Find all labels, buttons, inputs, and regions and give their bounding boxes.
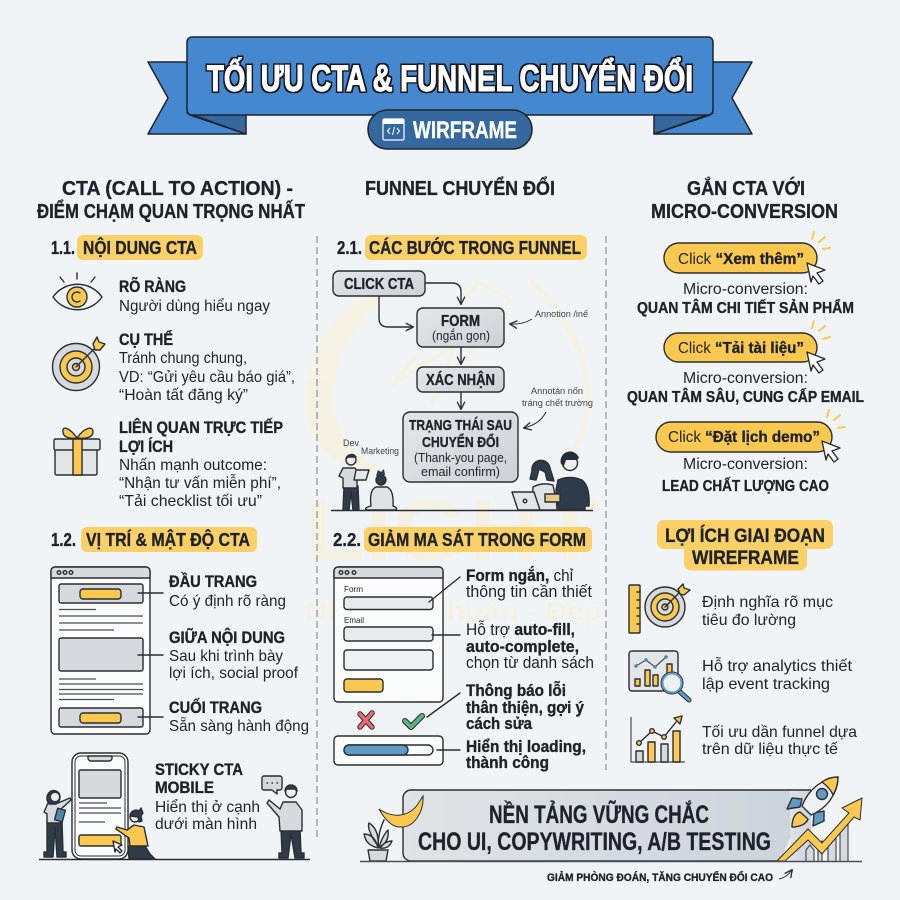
column heading: CTA (CALL TO ACTION) -: [62, 178, 293, 200]
ground line: [39, 858, 310, 860]
person: presenter with speech bubble: [262, 776, 304, 858]
text: liên quan: “Nhận tư vấn miễn phí”,: [119, 473, 281, 492]
person: marketing: Marketing: [361, 446, 399, 456]
icon: growth chart: [631, 716, 685, 762]
text: form ngắn: [466, 566, 592, 601]
icon: rocket: [787, 777, 838, 827]
section heading 2.1: [337, 235, 587, 260]
text: rõ ràng: RÕ RÀNG: [119, 276, 186, 296]
text: form ngắn: thông tin cần thiết: [466, 583, 592, 601]
icon: error cross: [360, 713, 372, 727]
ground line: [331, 510, 593, 512]
text: sticky CTA: MOBILE: [155, 779, 214, 797]
CTA button: tải tài liệu: Click “Tải tài liệu”: [678, 340, 804, 357]
callout lines: [427, 577, 460, 750]
text: định nghĩa: [702, 594, 833, 629]
text: giữa nội dung: GIỮA NỘI DUNG: [169, 627, 285, 647]
icon: ruler and target: [629, 584, 690, 633]
text: giữa nội dung: [169, 627, 299, 682]
CTA button: đặt lịch demo: Click “Đặt lịch demo”: [668, 429, 820, 446]
text: đầu trang: Có ý định rõ ràng: [169, 593, 286, 610]
icon: eye: [53, 273, 102, 310]
text: loading: Hiển thị loading,: [466, 738, 586, 756]
section heading 1.1: 1.1.: [51, 238, 75, 258]
watermark logo: Nhanh - Chuẩn - Đẹp: [305, 596, 602, 626]
text: cụ thể: VD: “Gửi yêu cầu báo giá”,: [119, 369, 295, 386]
text: liên quan: [119, 418, 283, 510]
left ribbon fold: [187, 113, 246, 134]
wireframe: progress card: [334, 736, 443, 765]
banner headline: CHO UI, COPYWRITING, A/B TESTING: [418, 828, 771, 856]
micro-conversion text 1: Micro-conversion:: [683, 281, 808, 298]
micro-conversion text 2: Micro-conversion:: [683, 370, 808, 387]
text: cụ thể: [119, 330, 295, 404]
wireframe: form window: Email: [344, 615, 364, 625]
icon: analytics: [629, 651, 689, 700]
micro-conversion text 2: [627, 370, 864, 406]
CTA button: đặt lịch demo: [656, 410, 845, 462]
section heading 2.1: CÁC BƯỚC TRONG FUNNEL: [369, 237, 581, 258]
box: form: FORM: [441, 313, 480, 330]
banner fill right: [790, 791, 811, 861]
heading: lợi ích giai đoạn wireframe: [657, 520, 833, 570]
box: click CTA: CLICK CTA: [344, 276, 414, 293]
wireframe pill: [368, 110, 532, 149]
text: sticky CTA: STICKY CTA: [155, 761, 243, 779]
ground line: [360, 860, 862, 862]
banner headline: NỀN TẢNG VỮNG CHẮC: [489, 799, 709, 829]
illustration: phone with sticky CTA: [72, 753, 128, 859]
text: analytics: [702, 656, 853, 693]
banner box: [403, 790, 811, 861]
panel: CTA column: [37, 178, 310, 860]
section heading 1.2: [51, 527, 257, 552]
text: liên quan: “Tải checklist tối ưu”: [119, 493, 262, 510]
icon: yellow crescent: [379, 796, 423, 827]
panel: funnel column: [331, 176, 594, 772]
banner body: [187, 37, 713, 115]
panel: bottom foundation banner: [360, 777, 862, 884]
text: tối ưu dần: [702, 724, 857, 758]
text: tối ưu dần: Tối ưu dần funnel dựa: [702, 724, 857, 741]
text: rõ ràng: Người dùng hiểu ngay: [119, 297, 270, 315]
text: định nghĩa: Định nghĩa rõ mục: [702, 594, 833, 611]
icon: success check: [405, 716, 422, 727]
text: loading: [466, 738, 586, 772]
micro-conversion text 3: LEAD CHẤT LƯỢNG CAO: [662, 476, 829, 495]
box: xác nhận: [417, 367, 504, 392]
icon: gift: [54, 428, 100, 475]
section heading 1.1: [51, 235, 203, 260]
title banner: [148, 37, 752, 149]
text: định nghĩa: tiêu đo lường: [702, 612, 796, 629]
watermark logo: LIGHT: [305, 483, 600, 579]
section heading 1.2: VỊ TRÍ & MẬT ĐỘ CTA: [86, 529, 250, 550]
left ribbon tail: [148, 62, 246, 134]
text: thông báo lỗi: thân thiện, gợi ý: [466, 699, 585, 717]
text: cuối trang: CUỐI TRANG: [169, 697, 262, 717]
section heading 2.2: [333, 527, 592, 552]
right ribbon tail: [654, 62, 752, 134]
text: cụ thể: Tránh chung chung,: [119, 350, 247, 367]
heading: lợi ích giai đoạn wireframe: WIREFRAME: [692, 547, 799, 569]
box: form: (ngắn gọn): [432, 328, 490, 343]
micro-conversion text 1: [637, 281, 854, 317]
CTA button: tải tài liệu: [664, 321, 830, 373]
text: giữa nội dung: Sau khi trình bày: [169, 648, 283, 665]
text: đầu trang: ĐẦU TRANG: [169, 572, 257, 591]
micro-conversion text 3: [662, 456, 829, 495]
wireframe: form window: Form: [344, 584, 363, 594]
box: trạng thái sau chuyển đổi: [403, 412, 518, 482]
micro-conversion text 3: Micro-conversion:: [683, 456, 808, 473]
icon: code window: [383, 119, 404, 140]
person: dev: [339, 438, 369, 510]
text: sticky CTA: [155, 761, 260, 833]
text: thông báo lỗi: Thông báo lỗi: [466, 681, 566, 700]
annotation: post conversion: tráng chết trường: [522, 398, 593, 408]
section heading 1.1: NỘI DUNG CTA: [83, 237, 197, 258]
text: thông báo lỗi: [466, 681, 585, 733]
column heading: [651, 176, 838, 223]
annotation: post conversion: Annotán nốn: [531, 386, 583, 396]
text: analytics: lập event tracking: [702, 676, 830, 693]
text: loading: thành công: [466, 754, 549, 772]
column heading: [37, 178, 305, 223]
text: cuối trang: Sẵn sàng hành động: [169, 716, 309, 735]
icon: target: [52, 337, 105, 390]
text: giữa nội dung: lợi ích, social proof: [169, 665, 299, 682]
CTA button: xem thêm: Click “Xem thêm”: [678, 251, 804, 268]
text: rõ ràng: [119, 276, 270, 315]
right ribbon fold: [654, 113, 713, 134]
section heading 2.2: GIẢM MA SÁT TRONG FORM: [368, 529, 586, 550]
text: auto-fill: [466, 620, 594, 672]
box: trạng thái sau chuyển đổi: (Thank-you page,: [414, 450, 507, 465]
section heading 1.2: 1.2.: [51, 530, 76, 550]
text: đầu trang: [169, 572, 286, 610]
text: tối ưu dần: trên dữ liệu thực tế: [702, 741, 838, 758]
wireframe: form window: [334, 567, 443, 702]
annotation: form: Annotion /inế: [535, 309, 588, 319]
text: sticky CTA: Hiển thị ở cạnh: [155, 798, 260, 816]
text: liên quan: LIÊN QUAN TRỰC TIẾP: [119, 418, 283, 437]
section heading 2.2: 2.2.: [333, 530, 361, 550]
column dividers: [317, 236, 606, 838]
box: trạng thái sau chuyển đổi: CHUYỂN ĐỔI: [422, 433, 499, 451]
caption: GIẢM PHÒNG ĐOÁN, TĂNG CHUYỂN ĐỔI CAO: [547, 871, 773, 884]
banner headline: [418, 799, 771, 856]
person: kneeling: [116, 808, 155, 859]
wireframe label: WIRFRAME: [413, 117, 517, 144]
icon: growth bars: [806, 821, 848, 861]
icon: potted plant: [364, 820, 392, 861]
person: marketing: [361, 446, 399, 510]
text: liên quan: Nhấn mạnh outcome:: [119, 457, 267, 474]
micro-conversion text 1: QUAN TÂM CHI TIẾT SẢN PHẨM: [637, 298, 854, 317]
text: cụ thể: “Hoàn tất đăng ký”: [119, 387, 248, 404]
title: TỐI ƯU CTA & FUNNEL CHUYỂN ĐỔI: [207, 56, 693, 99]
text: cuối trang: [169, 697, 309, 735]
text: cụ thể: CỤ THỂ: [119, 330, 173, 349]
text: form ngắn: Form ngắn, chỉ: [466, 566, 573, 585]
column heading: GẮN CTA VỚI: [687, 176, 805, 200]
text: auto-fill: auto-complete,: [466, 638, 579, 656]
text: liên quan: LỢI ÍCH: [119, 437, 173, 456]
text: auto-fill: chọn từ danh sách: [466, 654, 594, 672]
person: standing with clipboard: [44, 791, 71, 857]
CTA button: xem thêm: [664, 232, 830, 284]
text: sticky CTA: dưới màn hình: [155, 816, 257, 833]
box: trạng thái sau chuyển đổi: TRẠNG THÁI SAU: [409, 417, 512, 434]
column heading: ĐIỂM CHẠM QUAN TRỌNG NHẤT: [37, 200, 305, 223]
panel: micro-conversion column: [627, 176, 864, 762]
box: trạng thái sau chuyển đổi: email confirm): [421, 464, 500, 479]
heading: lợi ích giai đoạn wireframe: LỢI ÍCH GIAI ĐOẠN: [665, 524, 825, 547]
column heading: MICRO-CONVERSION: [651, 201, 838, 223]
column heading: FUNNEL CHUYỂN ĐỔI: [365, 176, 555, 200]
text: thông báo lỗi: cách sửa: [466, 715, 533, 733]
annotation: post conversion: [522, 386, 593, 428]
box: form: [417, 308, 504, 347]
flow arrows: [379, 283, 461, 409]
text: auto-fill: Hỗ trợ auto-fill,: [466, 620, 575, 639]
section heading 2.1: 2.1.: [337, 238, 362, 258]
icon: growth arrow: [777, 798, 862, 861]
watermark logo: [305, 268, 602, 626]
box: click CTA: [333, 271, 425, 296]
box: xác nhận: XÁC NHẬN: [426, 370, 495, 389]
annotation: form: [510, 309, 588, 324]
person: dev: Dev: [343, 438, 360, 448]
text: analytics: Hỗ trợ analytics thiết: [702, 656, 853, 675]
people: team at laptop: [512, 452, 589, 510]
micro-conversion text 2: QUAN TÂM SÂU, CUNG CẤP EMAIL: [627, 387, 864, 406]
wireframe: page layout: [51, 567, 163, 734]
